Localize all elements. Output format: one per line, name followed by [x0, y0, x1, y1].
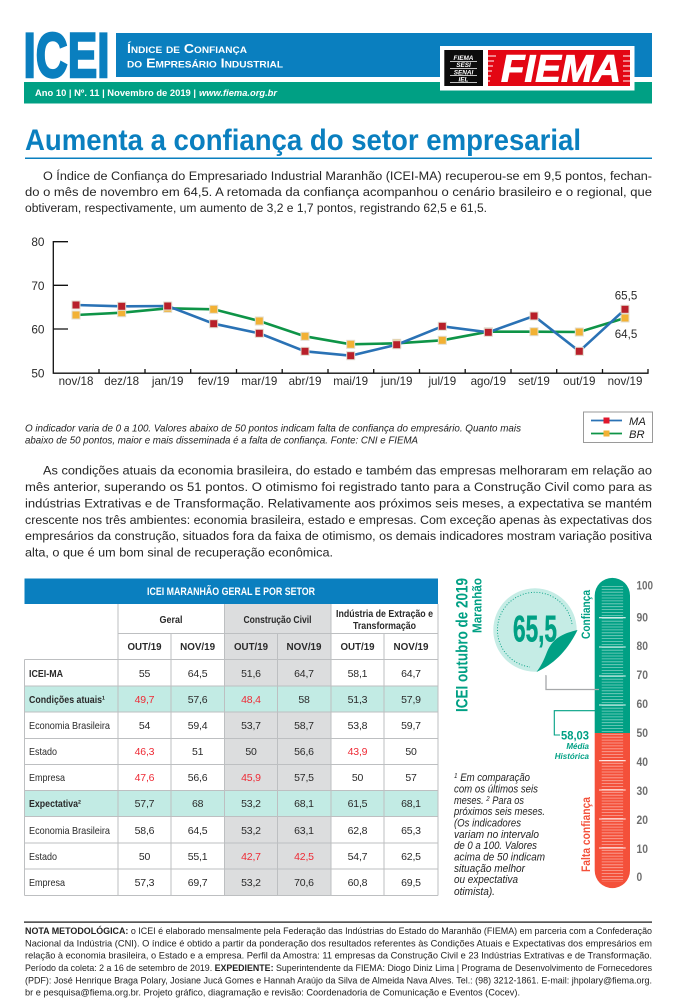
label: Falta confiança: Falta confiança	[579, 797, 593, 872]
row ICEI-MA: 64,7	[401, 668, 421, 680]
body paragraph: mês anterior, superando os 51 pontos. O otimismo foi registrado tanto para a Construção Civil como para as	[25, 480, 652, 494]
row Empresa	[29, 772, 417, 784]
MA series line	[76, 305, 625, 356]
footnote beside gauge: Para os	[490, 795, 525, 807]
green edition band: www.fiema.org.br	[199, 88, 278, 99]
row Empresa: 56,6	[188, 772, 208, 784]
month labels: jul/19	[427, 375, 456, 388]
row Estado: 62,5	[401, 851, 421, 863]
y axis labels	[31, 235, 45, 380]
row Estado: 56,6	[294, 746, 314, 758]
dotted ring	[497, 592, 572, 667]
row Economia Brasileira: 54	[139, 720, 150, 732]
period headers: OUT/19	[340, 641, 375, 653]
footnote beside gauge	[453, 772, 545, 898]
month labels: jun/19	[380, 375, 412, 388]
period headers: OUT/19	[234, 641, 268, 653]
row Economia Brasileira: Economia Brasileira	[29, 720, 110, 732]
chart note: abaixo de 50 pontos, maior e mais disseminada é a falta de confiança. Fonte: CNI e FIEMA	[25, 436, 418, 446]
row Estado: 42,7	[241, 851, 261, 863]
row Economia Brasileira: 59,7	[401, 720, 421, 732]
row Expectativa: Expectativa²	[29, 798, 81, 810]
body paragraph: empresários da construção, situados fora da faixa de otimismo, os demais indicadores mostram variação positiva	[25, 529, 652, 543]
scale labels	[636, 580, 653, 884]
methodological note: br e pesquisa@fiema.org.br. Projeto gráfico, diagramação e revisão: Coordenadoria de Comunicação e Eventos (Cocev).	[25, 986, 520, 998]
y axis labels: 50	[31, 366, 45, 380]
row Economia Brasileira: 53,2	[241, 825, 261, 837]
row Condições atuais: Condições atuais¹	[29, 694, 105, 706]
row ICEI-MA: 64,7	[294, 668, 314, 680]
methodological note: relação à economia brasileira, o Estado e a empresa. Perfil da Amostra: 11 empresas da Construção Civil e 23 Indústrias Extrativas e de Transformação.	[25, 950, 652, 960]
header banner	[24, 21, 652, 104]
scale labels: 70	[636, 670, 648, 682]
row Condições atuais	[29, 694, 421, 706]
minor ticks	[602, 586, 623, 882]
green edition band: Ano 10 | Nº. 11 | Novembro de 2019 |	[35, 88, 196, 99]
row Empresa: 47,6	[135, 772, 155, 784]
chart note: O indicador varia de 0 a 100. Valores abaixo de 50 pontos indicam falta de confiança do empresário. Quanto mais	[25, 424, 521, 434]
row Expectativa: 57,7	[135, 798, 155, 810]
body paragraph: alta, o que é um bom sinal de recuperação econômica.	[25, 546, 333, 560]
period headers: NOV/19	[394, 641, 429, 653]
BR series markers	[72, 304, 629, 348]
chart legend	[584, 412, 652, 442]
body paragraph: As condições atuais da economia brasileira, do estado e também das empresas melhoraram em relação ao	[43, 464, 652, 478]
row Condições atuais: 57,6	[188, 694, 208, 706]
footnote beside gauge: otimista).	[454, 886, 495, 898]
row Expectativa: 61,5	[348, 798, 368, 810]
scale labels: 10	[636, 844, 648, 856]
period headers: OUT/19	[128, 641, 162, 653]
row Economia Brasileira	[29, 720, 421, 732]
month labels: nov/18	[59, 375, 93, 388]
row Empresa: Empresa	[29, 772, 65, 784]
footnote beside gauge: 1	[454, 773, 458, 780]
row Empresa: 60,8	[348, 877, 368, 889]
row Estado	[29, 851, 421, 863]
row ICEI-MA: 55	[139, 668, 150, 680]
row Empresa: 53,2	[241, 877, 261, 889]
badge disc	[493, 588, 577, 672]
BR series line	[76, 308, 625, 344]
row Empresa: 69,7	[188, 877, 208, 889]
month labels: set/19	[518, 375, 550, 388]
row Expectativa: 53,2	[241, 798, 261, 810]
ICEI logotype: ICEI	[24, 21, 110, 91]
row Empresa: 69,5	[401, 877, 421, 889]
historical average marker: Média	[566, 742, 590, 751]
month labels: mar/19	[241, 375, 277, 388]
connector to scale	[546, 660, 599, 690]
scale labels: 30	[636, 786, 648, 798]
row Estado: 50	[245, 746, 257, 758]
row Estado: 54,7	[348, 851, 368, 863]
month labels: mai/19	[333, 375, 368, 388]
row ICEI-MA: 58,1	[348, 668, 368, 680]
row Estado	[29, 746, 417, 758]
period headers: NOV/19	[286, 641, 322, 653]
major ticks	[599, 618, 626, 848]
row Estado: Estado	[29, 746, 57, 758]
row Empresa: 70,6	[294, 877, 314, 889]
footnote beside gauge: (Os indicadores	[454, 818, 522, 830]
row Economia Brasileira: 65,3	[401, 825, 421, 837]
scale labels: 90	[636, 612, 648, 624]
row Estado: 55,1	[188, 851, 208, 863]
sector headers	[160, 608, 433, 632]
row Estado: 46,3	[135, 746, 155, 758]
row Estado: 43,9	[348, 746, 368, 758]
row Economia Brasileira: Economia Brasileira	[29, 825, 110, 837]
period headers	[128, 641, 429, 653]
month labels: out/19	[563, 375, 595, 388]
table: ICEI Maranhão geral e por setor	[24, 578, 438, 896]
green edition band	[24, 82, 652, 104]
FIEMA logo: FIEMA	[454, 55, 474, 62]
footnote beside gauge: próximos seis meses.	[453, 806, 545, 818]
methodological note: Período da coleta: 2 a 16 de setembro de 2019. EXPEDIENTE: Superintendente da FIEMA: Diogo Diniz Lima | Programa de Desenvolvimento de Fornecedores	[25, 962, 652, 973]
rotated heading: ICEI outubro de 2019 Maranhão: ICEI outubro de 2019	[454, 578, 472, 712]
footnote beside gauge: ou expectativa	[454, 874, 518, 886]
FIEMA logo: SESI	[456, 62, 471, 69]
month labels: fev/19	[198, 375, 229, 388]
row ICEI-MA	[29, 668, 421, 680]
row ICEI-MA: ICEI-MA	[29, 668, 63, 680]
methodological note	[24, 922, 652, 998]
row Estado: 42,5	[294, 851, 314, 863]
footnote beside gauge: Em comparação	[458, 772, 530, 784]
row Economia Brasileira: 58,6	[135, 825, 155, 837]
footnote beside gauge: situação melhor	[454, 863, 525, 875]
row Estado: 51	[192, 746, 204, 758]
FIEMA logo: FIEMA	[501, 48, 621, 90]
row Condições atuais: 48,4	[241, 694, 261, 706]
axes	[53, 242, 648, 373]
month labels: nov/19	[608, 375, 642, 388]
blue title band	[116, 33, 652, 77]
scale labels: 50	[636, 728, 648, 740]
row Empresa: 57	[405, 772, 417, 784]
month labels	[59, 375, 642, 388]
table fills	[24, 578, 438, 896]
row Economia Brasileira: 63,1	[294, 825, 314, 837]
end value labels: 65,5	[615, 290, 637, 302]
table title: ICEI MARANHÃO GERAL E POR SETOR	[147, 585, 315, 598]
row Empresa	[29, 877, 421, 889]
row ICEI-MA: 51,6	[241, 668, 261, 680]
chart legend: MA	[629, 416, 646, 428]
row Economia Brasileira: 53,7	[241, 720, 261, 732]
historical average marker	[554, 711, 595, 761]
rotated heading: ICEI outubro de 2019 Maranhão: Maranhão	[470, 578, 484, 633]
sector headers: Geral	[160, 614, 183, 626]
historical average marker: 58,03	[561, 728, 589, 742]
scale labels: 80	[636, 641, 648, 653]
footnote beside gauge: 2	[485, 796, 490, 803]
scale labels: 0	[636, 872, 642, 884]
methodological note: NOTA METODOLÓGICA: o ICEI é elaborado mensalmente pela Federação das Indústrias do Estado do Maranhão (FIEMA) em parceria com a Confederação	[25, 925, 652, 936]
end value labels: 64,5	[615, 328, 637, 341]
row Economia Brasileira: 59,4	[188, 720, 208, 732]
month labels: ago/19	[471, 375, 506, 388]
row Expectativa: 68,1	[294, 798, 314, 810]
row Expectativa	[29, 798, 421, 810]
row Empresa: 57,3	[135, 877, 155, 889]
row Condições atuais: 58	[298, 694, 310, 706]
y axis labels: 80	[31, 235, 45, 249]
methodological note: Nacional da Indústria (CNI). O índice é obtido a partir da ponderação dos resultados referentes às Condições Atuais e Expectativas dos empresários em	[25, 938, 652, 948]
body paragraph	[25, 464, 652, 560]
label: Confiança: Confiança	[579, 590, 593, 639]
month labels: abr/19	[289, 375, 321, 388]
y axis labels: 70	[31, 279, 45, 293]
badge value: 65,5	[513, 608, 557, 650]
footnote beside gauge: com os últimos seis	[454, 784, 539, 796]
red lower section	[595, 733, 630, 888]
line chart: MA vs BR	[31, 235, 648, 388]
scale labels: 20	[636, 815, 648, 827]
row Empresa: 50	[352, 772, 363, 784]
chart legend: BR	[629, 429, 645, 441]
row Condições atuais: 51,3	[348, 694, 368, 706]
end value labels	[615, 290, 637, 341]
page curl	[536, 630, 578, 672]
headline: Aumenta a confiança do setor empresarial	[25, 125, 581, 157]
intro paragraph: obtiveram, respectivamente, um aumento de 3,2 e 1,7 pontos, registrando 62,5 e 61,5.	[25, 201, 487, 215]
rotated heading: ICEI outubro de 2019 Maranhão	[454, 578, 484, 712]
footnote beside gauge: acima de 50 indicam	[454, 852, 545, 864]
row Estado: Estado	[29, 851, 57, 863]
body paragraph: crescente nos três ambientes: economia brasileira, estado e empresas. Com exceção apenas às expectativas dos	[25, 513, 652, 527]
sector headers: Construção Civil	[244, 614, 312, 626]
scale labels: 40	[636, 757, 648, 769]
page curl cut-out	[537, 630, 585, 680]
row ICEI-MA: 64,5	[188, 668, 208, 680]
row Empresa: Empresa	[29, 877, 65, 889]
row Empresa: 57,5	[294, 772, 314, 784]
sector headers: Indústria de Extração e	[336, 608, 433, 620]
row Economia Brasileira: 62,8	[348, 825, 368, 837]
row Condições atuais: 49,7	[135, 694, 155, 706]
green upper section	[595, 578, 630, 733]
row Expectativa: 68,1	[401, 798, 421, 810]
row Economia Brasileira: 53,8	[348, 720, 368, 732]
intro paragraph: O Índice de Confiança do Empresariado Industrial Maranhão (ICEI-MA) recuperou-se em 9,5 pontos, fechan-	[43, 168, 652, 183]
blue title band: do Empresário Industrial	[127, 56, 284, 70]
footnote beside gauge: variam no intervalo	[454, 829, 539, 841]
blue title band: Índice de Confiança	[127, 41, 248, 56]
y axis labels: 60	[31, 322, 45, 336]
table grid	[24, 604, 438, 896]
row Economia Brasileira	[29, 825, 421, 837]
row Economia Brasileira: 58,7	[294, 720, 314, 732]
row Estado: 50	[139, 851, 150, 863]
period headers: NOV/19	[180, 641, 215, 653]
intro paragraph	[25, 168, 652, 215]
intro paragraph: do o mês de novembro em 64,5. A retomada da confiança acompanhou o cenário brasileiro e o regional, que	[25, 185, 652, 199]
MA series markers	[72, 301, 629, 360]
methodological note: (PDF): José Henrique Braga Polary, Josiane Jucá Gomes e Hannah Araújo da Silva de Almeida Nava Alves. Tel.: (98) 3212-1861. E-mail: jhpolary@fiema.org.	[25, 974, 652, 986]
sector headers: Transformação	[353, 620, 416, 632]
value badge 65,5	[493, 588, 599, 690]
footnote beside gauge: de 0 a 100. Valores	[454, 840, 538, 852]
FIEMA logo: IEL	[459, 76, 469, 83]
row Estado: 50	[405, 746, 417, 758]
body paragraph: indústrias Extrativas e de Transformação. Relativamente aos próximos seis meses, a expectativa se mantém	[25, 496, 652, 510]
FIEMA logo	[440, 46, 634, 90]
month labels: jan/19	[151, 375, 183, 388]
thermometer gauge	[579, 578, 653, 888]
row Empresa: 45,9	[241, 772, 261, 784]
historical average marker: Histórica	[555, 752, 590, 761]
scale labels: 100	[636, 580, 653, 592]
FIEMA logo: SENAI	[454, 69, 473, 76]
footnote beside gauge: meses.	[454, 795, 486, 807]
row Condições atuais: 57,9	[401, 694, 421, 706]
chart note	[25, 424, 521, 446]
month labels: dez/18	[104, 375, 139, 388]
scale labels: 60	[636, 699, 648, 711]
row Expectativa: 68	[192, 798, 204, 810]
row Economia Brasileira: 64,5	[188, 825, 208, 837]
